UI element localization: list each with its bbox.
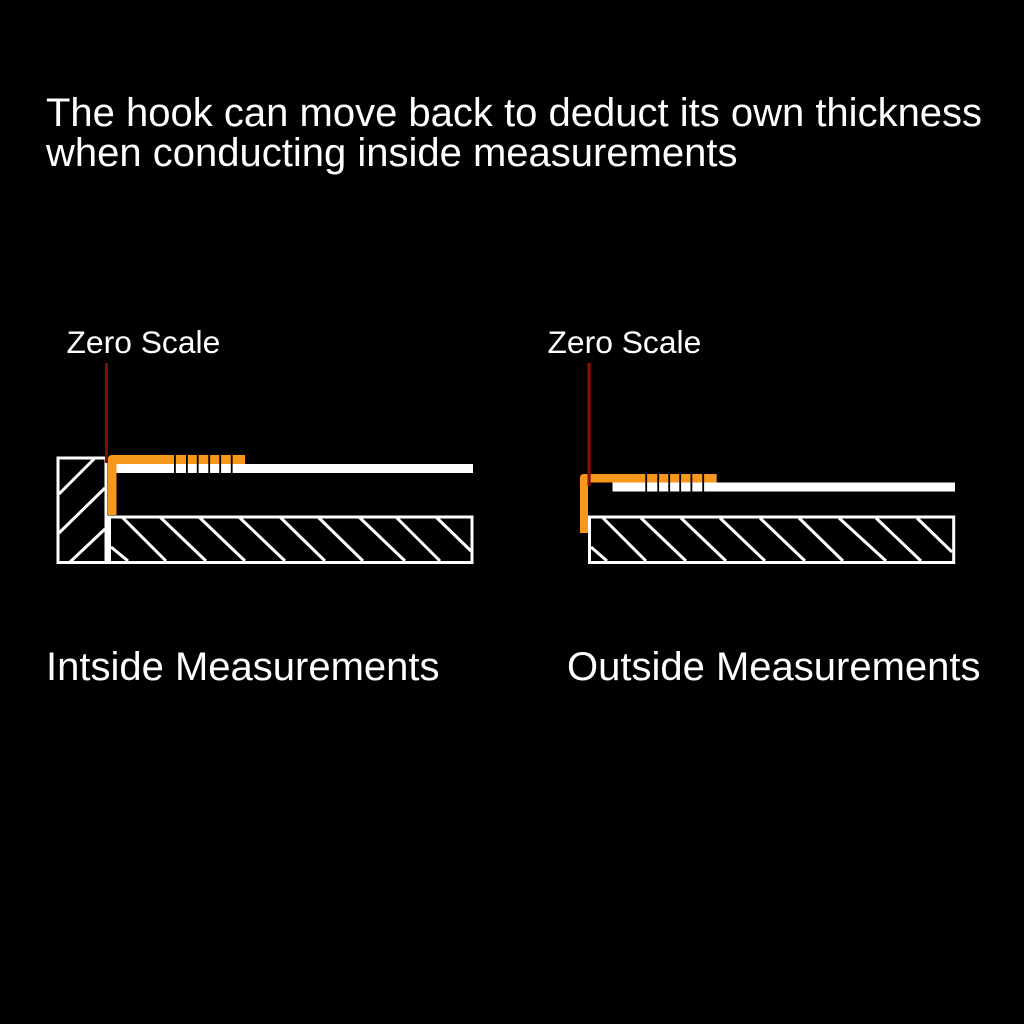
orange hook [108, 455, 245, 515]
title: when conducting inside measurements [45, 131, 738, 175]
caption: outside: Outside Measurements [567, 645, 981, 689]
title [45, 91, 982, 175]
title: The hook can move back to deduct its own thickness [46, 91, 982, 135]
white tape blade [116, 464, 473, 473]
hatched wall block [58, 458, 106, 562]
zero scale line [588, 363, 591, 486]
orange hook [580, 474, 717, 533]
scale ticks [174, 455, 233, 473]
zero scale line [105, 363, 108, 463]
hatched base block [590, 517, 954, 562]
panel: inside measurement diagram [58, 324, 473, 564]
white tape blade [612, 482, 955, 492]
zero scale label: Zero Scale [66, 324, 220, 360]
scale ticks [645, 474, 704, 492]
panel: outside measurement diagram [548, 324, 955, 562]
caption: inside: Intside Measurements [46, 645, 440, 689]
zero scale label: Zero Scale [548, 324, 701, 360]
hatched base block [105, 516, 472, 564]
